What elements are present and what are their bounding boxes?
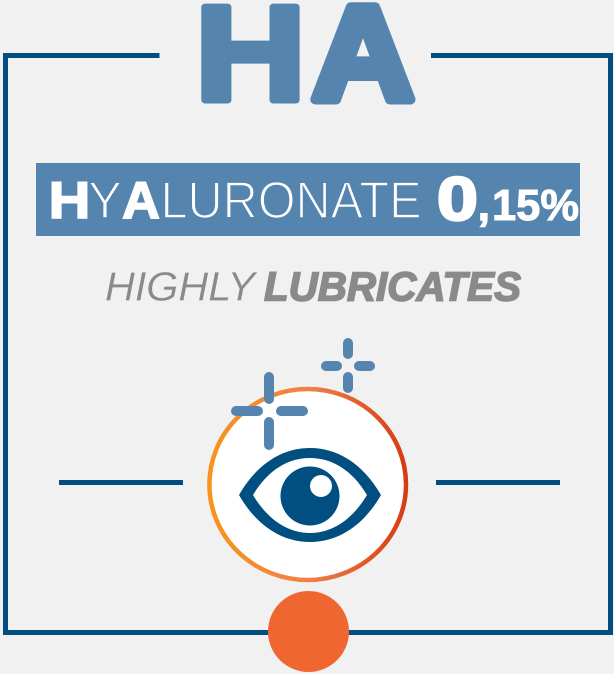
banner: hyaluronate 0,15%: , — [478, 182, 490, 229]
banner: hyaluronate 0,15% — [36, 163, 580, 236]
banner: hyaluronate 0,15%: A — [122, 172, 160, 230]
banner: hyaluronate 0,15%: 15% — [492, 181, 579, 230]
subtitle: highly lubricates: HIGHLY — [105, 264, 258, 310]
icon: eye in ring — [209, 389, 406, 580]
icon: large sparkle — [231, 372, 308, 450]
banner: hyaluronate 0,15%: 0 — [437, 165, 478, 233]
banner: hyaluronate 0,15%: LURONATE — [160, 172, 422, 230]
left connector line — [59, 480, 183, 485]
title: HA — [195, 0, 414, 129]
subtitle: highly lubricates: LUBRICATES — [264, 264, 521, 310]
icon: small sparkle — [321, 338, 375, 393]
orange dot — [268, 591, 349, 672]
banner: hyaluronate 0,15%: H — [48, 172, 90, 230]
banner: hyaluronate 0,15%: Y — [88, 172, 122, 230]
right connector line — [436, 480, 560, 485]
subtitle: highly lubricates — [105, 264, 521, 310]
